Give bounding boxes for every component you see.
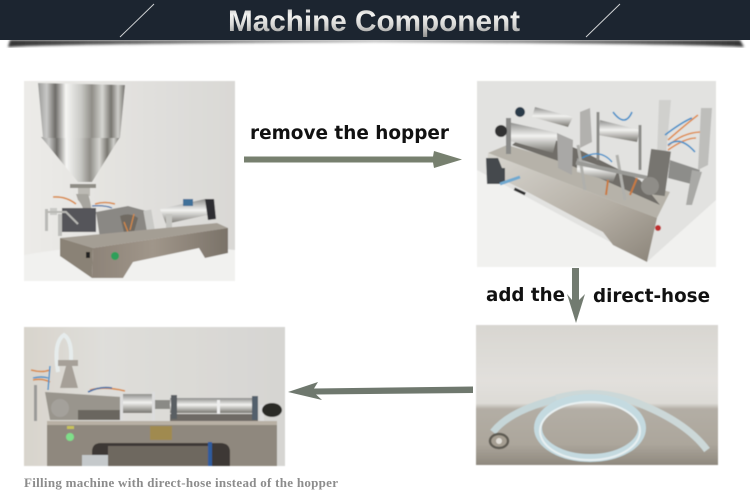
photo: finished machine with direct hose	[24, 327, 285, 466]
caption: Filling machine with direct-hose instead of the hopper	[24, 475, 338, 490]
arrow: downward	[567, 268, 585, 323]
title: Machine Component	[228, 5, 520, 38]
photo: direct hose	[476, 325, 718, 465]
header banner	[0, 0, 750, 47]
photo: machine without hopper	[477, 81, 716, 267]
photo: filling machine with hopper	[24, 81, 235, 281]
arrow: to left	[288, 382, 473, 400]
arrow: to right	[244, 151, 462, 168]
heading: remove the hopper: remove the hopper	[250, 122, 450, 144]
label: direct-hose: direct-hose	[593, 285, 710, 307]
label: add the: add the	[486, 284, 565, 306]
